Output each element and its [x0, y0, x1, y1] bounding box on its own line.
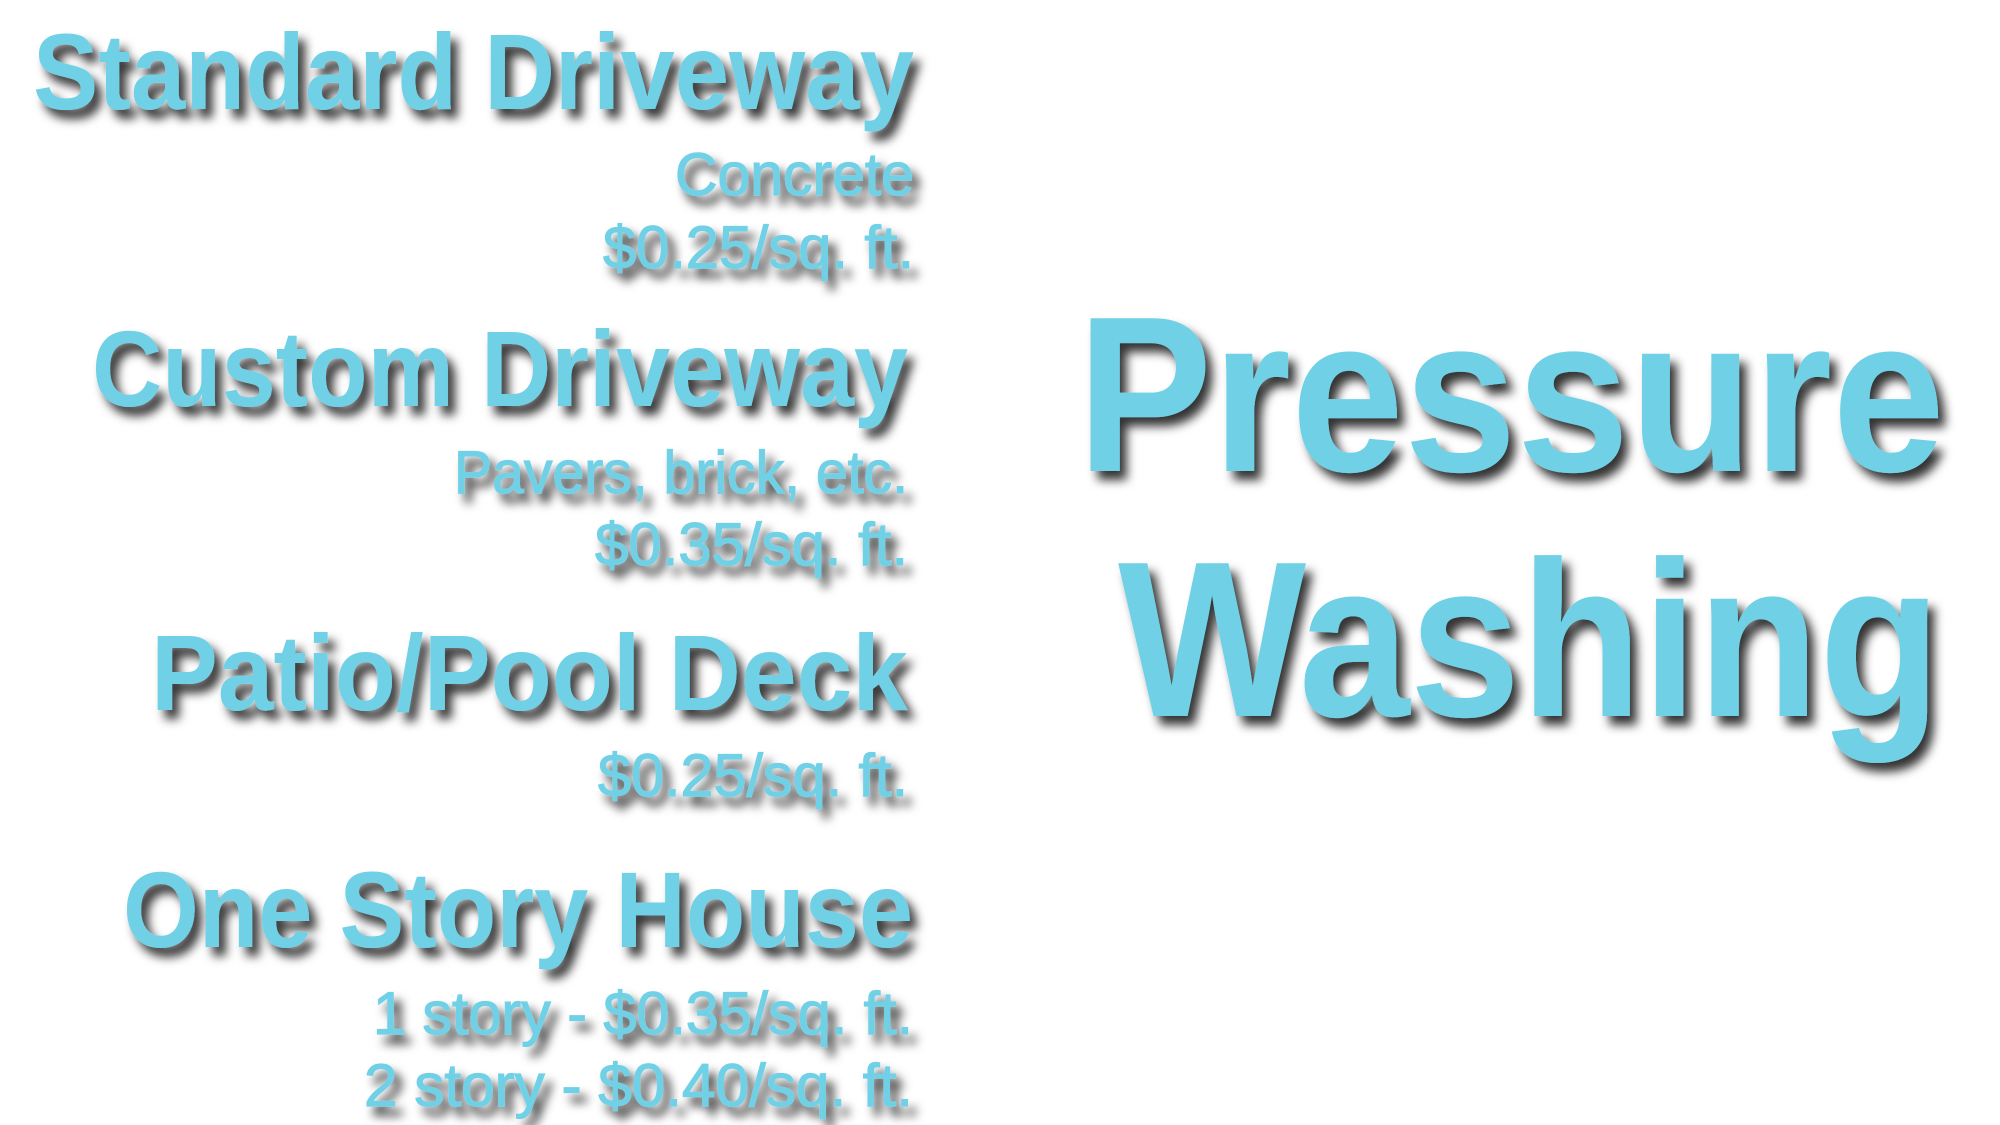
heading: Patio/Pool Deck: Patio/Pool Deck [151, 612, 909, 733]
price: 1 story: 1 story - $0.35/sq. ft. [373, 980, 913, 1047]
price: standard driveway: $0.25/sq. ft. [603, 214, 914, 281]
item: one story house [123, 849, 913, 1119]
text: Pavers, brick, etc.: Pavers, brick, etc. [454, 439, 908, 506]
heading: Standard Driveway: Standard Driveway [33, 11, 914, 132]
item: custom driveway [92, 308, 908, 578]
heading: One Story House: One Story House [123, 849, 913, 970]
item: standard driveway [33, 11, 914, 281]
item: patio/pool deck [151, 612, 909, 809]
panel: price list [33, 11, 914, 1119]
title: Pressure Washing [1077, 271, 1945, 764]
text: Concrete: Concrete [675, 141, 914, 208]
title: Pressure Washing: Pressure [1077, 271, 1945, 519]
price: 2 story: 2 story - $0.40/sq. ft. [364, 1052, 913, 1119]
heading: Custom Driveway: Custom Driveway [92, 308, 908, 429]
price: custom driveway: $0.35/sq. ft. [595, 511, 908, 578]
price: patio: $0.25/sq. ft. [598, 742, 908, 809]
